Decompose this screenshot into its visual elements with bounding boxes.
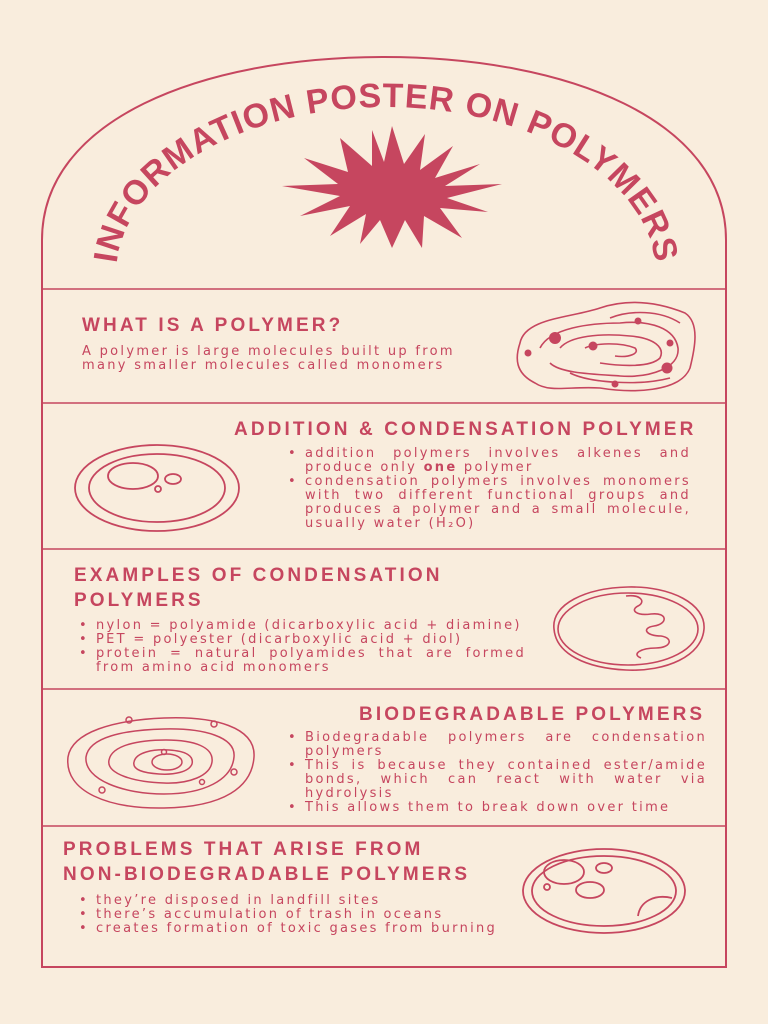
text: problems bullets: they’re disposed in landfill sites: [96, 893, 380, 908]
icon: concentric blob: [67, 716, 255, 809]
text: biodegradable bullets: This is because they contained ester/amide bonds, which can react with water via hydrolysis: [305, 758, 707, 801]
text: addition/condensation bullets: addition polymers involves alkenes and produce only one polymer: [305, 446, 691, 475]
heading: problems from non-biodegradable: [63, 839, 470, 885]
text: biodegradable bullets: [290, 730, 707, 815]
text: addition/condensation bullets: condensation polymers involves monomers with two different functional groups and produces a polymer and a small molecule, usually water (H₂O): [305, 474, 691, 531]
text: examples bullets: [81, 618, 526, 675]
text: problems bullets: there’s accumulation of trash in oceans: [96, 907, 443, 922]
icon: double circle cell: [74, 444, 240, 532]
heading: problems from non-biodegradable: PROBLEMS THAT ARISE FROM: [63, 839, 423, 860]
text: examples bullets: PET = polyester (dicarboxylic acid + diol): [96, 632, 462, 647]
heading: problems from non-biodegradable: NON-BIODEGRADABLE POLYMERS: [63, 864, 470, 885]
text: polymer definition: [82, 344, 455, 373]
text: examples bullets: protein = natural polyamides that are formed from amino acid monomers: [96, 646, 526, 675]
text: addition/condensation bullets: [290, 446, 691, 531]
title: arched text: INFORMATION POSTER ON POLYMERS: [94, 84, 677, 262]
icon: bubble cell: [522, 848, 686, 934]
text: biodegradable bullets: This allows them to break down over time: [305, 800, 670, 815]
text: biodegradable bullets: Biodegradable polymers are condensation polymers: [305, 730, 707, 759]
text: examples bullets: nylon = polyamide (dicarboxylic acid + diamine): [96, 618, 522, 633]
heading: examples of condensation polymers: POLYMERS: [74, 590, 204, 611]
text: problems bullets: creates formation of toxic gases from burning: [96, 921, 497, 936]
heading: biodegradable polymers: BIODEGRADABLE POLYMERS: [359, 704, 705, 725]
text: polymer definition: A polymer is large molecules built up from: [82, 344, 455, 359]
heading: addition & condensation: ADDITION & CONDENSATION POLYMER: [234, 419, 696, 440]
icon: tangled polymer blob: [516, 302, 696, 392]
icon: wavy cell: [553, 586, 705, 671]
icon: starburst: [282, 126, 502, 248]
text: polymer definition: many smaller molecules called monomers: [82, 358, 445, 373]
heading: examples of condensation polymers: [74, 565, 443, 611]
text: problems bullets: [81, 893, 497, 936]
heading: examples of condensation polymers: EXAMPLES OF CONDENSATION: [74, 565, 443, 586]
heading: what is a polymer: WHAT IS A POLYMER?: [82, 315, 343, 336]
